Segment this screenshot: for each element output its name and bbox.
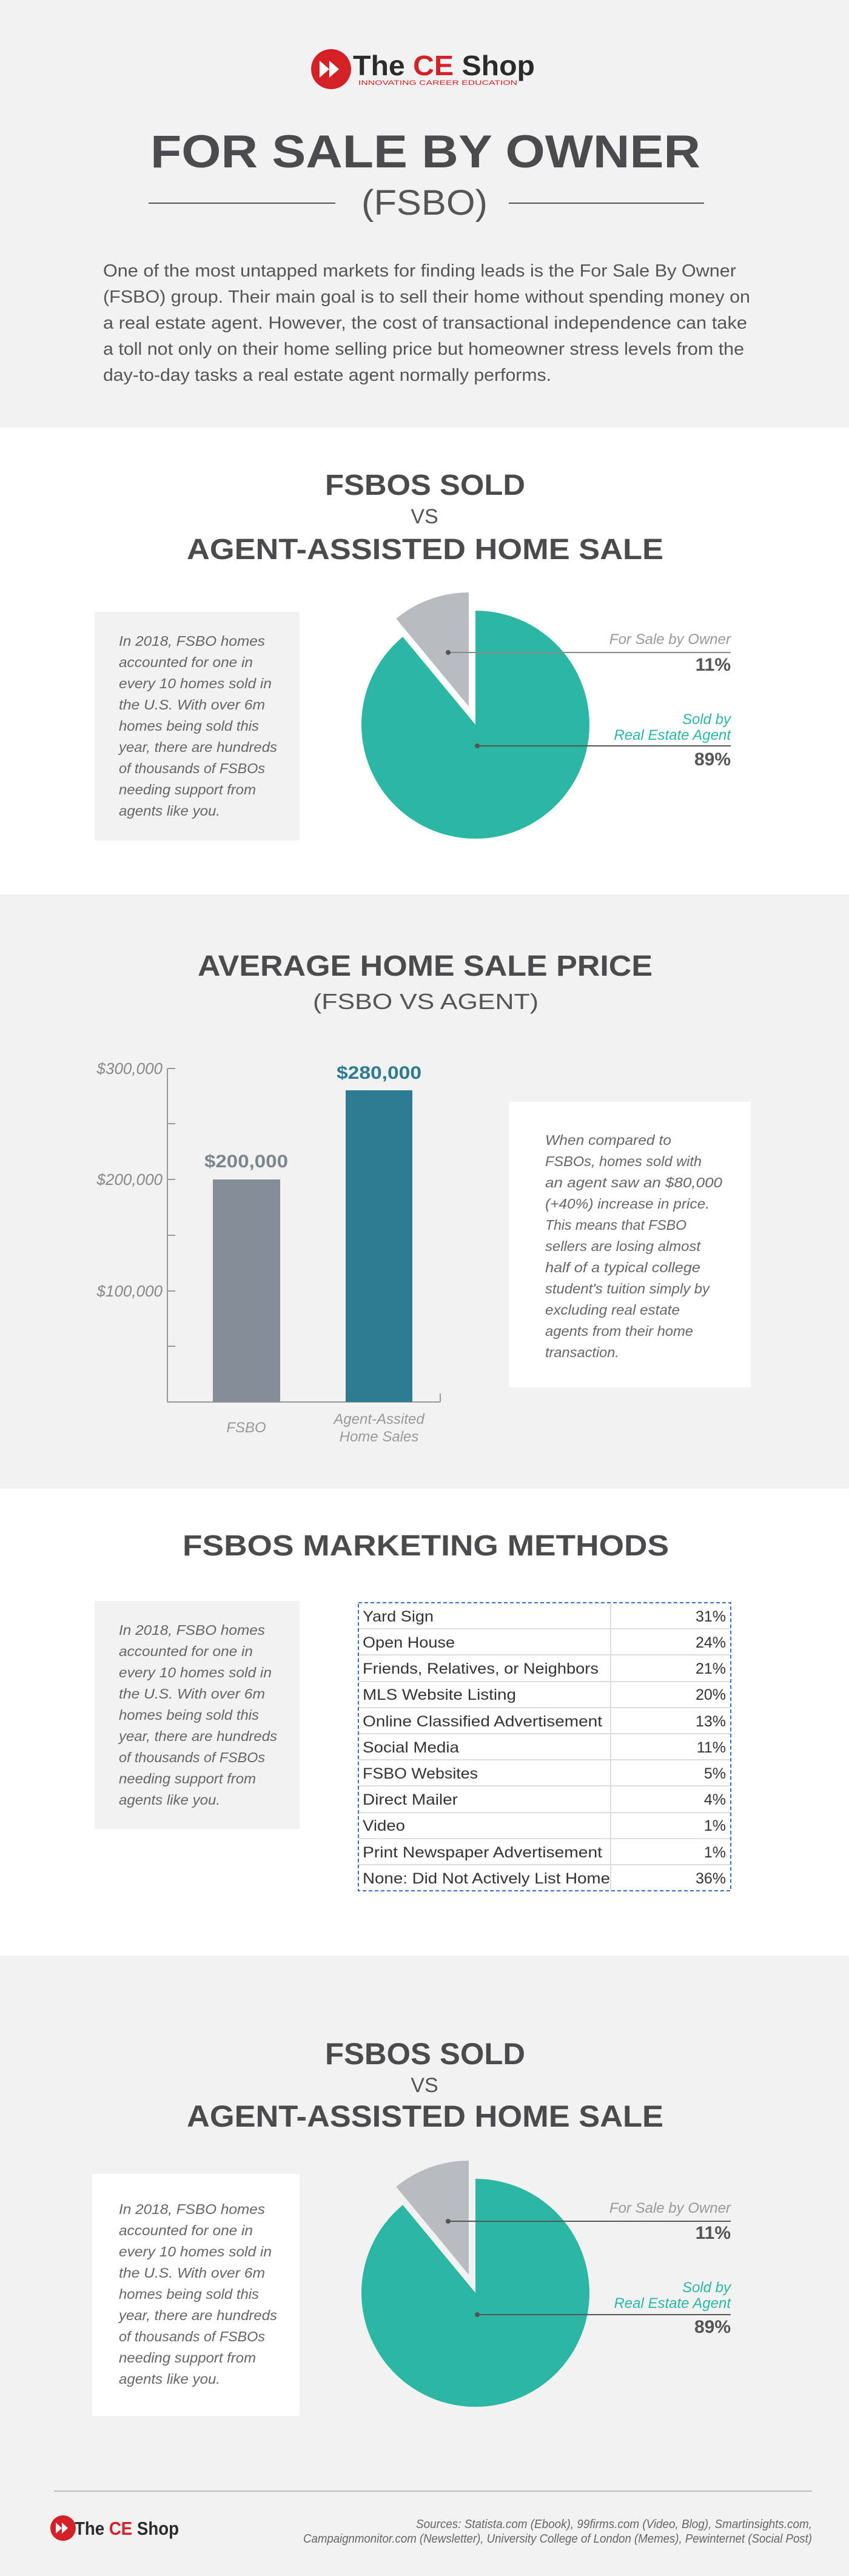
table: 4% — [704, 1791, 726, 1808]
text block: of thousands of FSBOs — [119, 2329, 266, 2344]
pie labels: Sold by — [682, 2279, 732, 2296]
heading: FSBOS SOLD — [325, 2037, 525, 2071]
footer logo — [50, 2515, 179, 2541]
text block: year, there are hundreds — [118, 1728, 278, 1744]
panel: FSBOs sold vs agent-assisted (1) — [95, 469, 732, 840]
footer logo: The CE Shop — [75, 2518, 179, 2539]
text block — [95, 612, 300, 840]
table: MLS Website Listing — [363, 1686, 516, 1703]
pie labels: 89% — [694, 2317, 731, 2337]
heading: AGENT-ASSISTED HOME SALE — [187, 534, 663, 566]
table: 20% — [696, 1686, 726, 1703]
table: 13% — [696, 1713, 726, 1730]
text block: of thousands of FSBOs — [119, 1749, 266, 1765]
panel: average home sale price — [96, 950, 751, 1445]
title: FOR SALE BY OWNER — [150, 126, 700, 178]
bar: agent — [346, 1090, 412, 1402]
callout text box: agents from their home — [545, 1323, 693, 1339]
callout text box: sellers are losing almost — [545, 1238, 702, 1254]
text block: In 2018, FSBO homes — [119, 633, 266, 649]
callout text box: transaction. — [545, 1344, 619, 1360]
heading: AVERAGE HOME SALE PRICE — [198, 950, 653, 982]
heading: FSBOS SOLD — [325, 469, 525, 501]
bar chart: $300,000 — [96, 1059, 163, 1078]
bar chart: $280,000 — [337, 1063, 421, 1083]
callout text box: (+40%) increase in price. — [545, 1196, 710, 1212]
text block: agents like you. — [119, 1792, 220, 1808]
footer — [50, 2491, 812, 2546]
heading — [187, 2037, 663, 2133]
text block: every 10 homes sold in — [119, 676, 272, 691]
intro paragraph — [103, 261, 750, 385]
table: Friends, Relatives, or Neighbors — [363, 1660, 599, 1677]
table — [358, 1603, 731, 1891]
heading: (FSBO VS AGENT) — [313, 989, 539, 1014]
bar chart: $100,000 — [96, 1282, 163, 1300]
callout text box: When compared to — [545, 1132, 671, 1148]
text block: of thousands of FSBOs — [119, 760, 266, 776]
table: 24% — [696, 1634, 726, 1651]
callout text box: excluding real estate — [545, 1302, 680, 1318]
pie labels — [446, 2200, 732, 2337]
pie labels: For Sale by Owner — [609, 631, 731, 648]
text block: needing support from — [119, 782, 256, 797]
table: 5% — [704, 1765, 726, 1782]
logo: The CE Shop — [311, 49, 535, 89]
text block: the U.S. With over 6m — [119, 2265, 265, 2281]
bar chart: Agent-Assited — [332, 1411, 424, 1427]
heading: VS — [411, 505, 438, 528]
heading — [198, 950, 653, 1014]
pie labels: Sold by — [682, 711, 732, 728]
table: 21% — [696, 1660, 726, 1677]
table: None: Did Not Actively List Home — [363, 1870, 610, 1887]
text block: In 2018, FSBO homes — [119, 2201, 266, 2217]
heading: AGENT-ASSISTED HOME SALE — [187, 2099, 663, 2133]
text block: needing support from — [119, 1771, 256, 1786]
pie labels — [446, 631, 732, 770]
bar chart — [96, 1059, 440, 1445]
text block: agents like you. — [119, 803, 220, 819]
table: Yard Sign — [363, 1608, 434, 1625]
text block: year, there are hundreds — [118, 739, 278, 755]
intro paragraph: (FSBO) group. Their main goal is to sell their home without spending money on — [103, 287, 750, 307]
intro paragraph: a real estate agent. However, the cost of transactional independence can take — [103, 314, 747, 333]
intro paragraph: One of the most untapped markets for finding leads is the For Sale By Owner — [103, 261, 736, 281]
table: Online Classified Advertisement — [363, 1713, 602, 1730]
pie labels: 11% — [696, 655, 731, 675]
bar chart: $200,000 — [204, 1152, 288, 1172]
pie labels: 11% — [696, 2223, 731, 2243]
intro paragraph: a toll not only on their home selling price but homeowner stress levels from the — [103, 340, 744, 359]
text block: the U.S. With over 6m — [119, 1686, 265, 1702]
callout text box: an agent saw an $80,000 — [545, 1175, 722, 1190]
text block: agents like you. — [119, 2371, 220, 2387]
pie labels: Real Estate Agent — [614, 2295, 731, 2312]
text block: accounted for one in — [119, 2222, 253, 2238]
text block: homes being sold this — [119, 1707, 260, 1723]
intro paragraph: day-to-day tasks a real estate agent normally performs. — [103, 366, 551, 385]
callout text box: This means that FSBO — [545, 1217, 686, 1233]
table: Direct Mailer — [363, 1791, 458, 1808]
text block: In 2018, FSBO homes — [119, 1622, 266, 1638]
text block: every 10 homes sold in — [119, 2244, 272, 2259]
heading: FSBOS MARKETING METHODS — [183, 1530, 669, 1562]
sources: Sources: Statista.com (Ebook), 99firms.com (Video, Blog), Smartinsights.com, — [416, 2518, 812, 2531]
text block: needing support from — [119, 2350, 256, 2366]
table: Print Newspaper Advertisement — [363, 1844, 602, 1861]
sources — [303, 2518, 812, 2546]
callout text box: FSBOs, homes sold with — [545, 1153, 702, 1169]
text block: the U.S. With over 6m — [119, 697, 265, 713]
table: 36% — [696, 1870, 726, 1887]
heading: VS — [411, 2074, 438, 2097]
bar: FSBO — [213, 1179, 280, 1402]
bar chart: Home Sales — [340, 1429, 418, 1445]
subtitle: (FSBO) with rules: (FSBO) — [361, 183, 488, 223]
text block: accounted for one in — [119, 654, 253, 670]
heading — [187, 469, 663, 566]
table: Social Media — [363, 1739, 459, 1756]
pie labels: 89% — [694, 750, 731, 770]
logo: The CE Shop: The CE Shop — [353, 50, 535, 81]
table: 1% — [704, 1817, 726, 1834]
table: 1% — [704, 1844, 726, 1861]
bar chart: $200,000 — [96, 1170, 163, 1189]
bar chart: FSBO — [226, 1420, 266, 1436]
logo: The CE Shop: INNOVATING CAREER EDUCATION — [358, 79, 517, 87]
sources: Campaignmonitor.com (Newsletter), University College of London (Memes), Pewinternet (Social Post) — [303, 2532, 812, 2546]
table: 11% — [697, 1739, 726, 1756]
callout text box: student's tuition simply by — [545, 1281, 711, 1296]
pie labels: Real Estate Agent — [614, 727, 731, 743]
icon: red circle with arrows — [311, 49, 351, 89]
pie chart — [361, 592, 589, 839]
panel: FSBOs sold vs agent-assisted (2) — [92, 2037, 732, 2416]
text block: accounted for one in — [119, 1643, 253, 1659]
text block: homes being sold this — [119, 2286, 260, 2302]
text block — [95, 1601, 300, 1829]
text block: every 10 homes sold in — [119, 1665, 272, 1680]
text block: homes being sold this — [119, 718, 260, 734]
table: Video — [363, 1817, 405, 1834]
pie labels: For Sale by Owner — [609, 2200, 731, 2216]
pie chart — [361, 2161, 589, 2407]
panel: FSBOs marketing methods — [95, 1530, 731, 1891]
table: 31% — [696, 1608, 726, 1625]
callout text box: half of a typical college — [545, 1259, 700, 1275]
text block — [92, 2174, 300, 2416]
callout text box — [509, 1102, 751, 1387]
table: FSBO Websites — [363, 1765, 478, 1782]
text block: year, there are hundreds — [118, 2307, 278, 2323]
table: Open House — [363, 1634, 455, 1651]
